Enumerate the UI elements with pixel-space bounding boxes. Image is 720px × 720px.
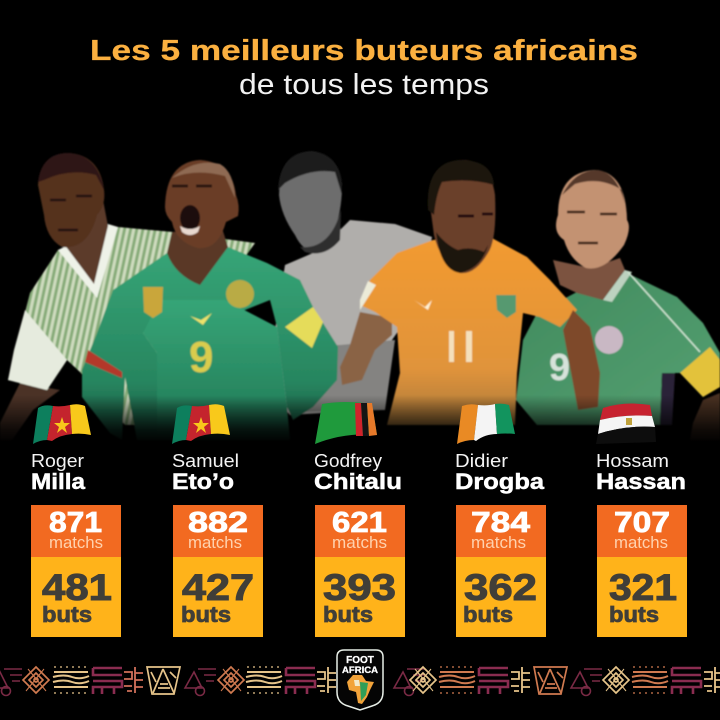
- matches box: matchs: [614, 533, 668, 552]
- matches box: matchs: [188, 533, 242, 552]
- goals box: [315, 557, 405, 637]
- player: Samuel Eto'o: [82, 160, 338, 440]
- logo: Foot Africa: [337, 650, 383, 710]
- matches box: 707: [614, 507, 670, 539]
- matches box: matchs: [471, 533, 526, 552]
- icon: Africa map: [347, 675, 374, 704]
- goals box: 393: [323, 567, 396, 608]
- matches box: matchs: [49, 533, 103, 552]
- player photos: [0, 151, 720, 440]
- name: [31, 451, 86, 494]
- flag: Zambia: [315, 402, 377, 444]
- name: [314, 451, 402, 494]
- matches box: 621: [332, 507, 387, 539]
- flag: Ivory Coast: [457, 404, 515, 444]
- flag: Cameroon (Milla): [33, 404, 91, 444]
- player card: Hossam Hassan: [596, 451, 687, 637]
- matches box: 871: [49, 507, 102, 539]
- name: Hossam: [596, 451, 669, 471]
- matches box: [597, 505, 687, 557]
- goals box: [597, 557, 687, 637]
- player: Didier Drogba: [340, 160, 600, 425]
- name: Eto’o: [172, 469, 234, 494]
- player card: Samuel Eto'o: [172, 451, 263, 637]
- flag: Cameroon (Eto'o): [172, 404, 230, 444]
- title: de tous les temps: [239, 69, 489, 101]
- matches box: [31, 505, 121, 557]
- name: [172, 451, 239, 494]
- goals box: 362: [464, 567, 537, 608]
- goals box: buts: [609, 602, 659, 627]
- flag: Egypt: [596, 404, 656, 444]
- name: Hassan: [596, 469, 686, 494]
- goals box: 321: [609, 567, 677, 608]
- goals box: [31, 557, 121, 637]
- name: Milla: [31, 469, 86, 494]
- matches box: [173, 505, 263, 557]
- title: Les 5 meilleurs buteurs africains: [90, 35, 638, 67]
- player card: Didier Drogba: [455, 451, 546, 637]
- title: [90, 35, 638, 101]
- goals box: buts: [42, 602, 92, 627]
- matches box: 784: [471, 507, 530, 539]
- matches box: matchs: [332, 533, 387, 552]
- goals box: [173, 557, 263, 637]
- name: [596, 451, 686, 494]
- name: Chitalu: [314, 469, 402, 494]
- name: Roger: [31, 451, 84, 471]
- goals box: 427: [182, 567, 254, 608]
- matches box: [315, 505, 405, 557]
- footer pattern: left band: [0, 667, 336, 696]
- goals box: buts: [463, 602, 513, 627]
- player: Hossam Hassan: 9: [549, 347, 570, 389]
- logo: Foot Africa: FOOT: [346, 655, 374, 666]
- player: Hossam Hassan: [516, 170, 720, 440]
- name: Drogba: [455, 469, 545, 494]
- player: Roger Milla: [0, 153, 255, 440]
- photo fade to black: [0, 395, 720, 445]
- name: [455, 451, 545, 494]
- name: Godfrey: [314, 451, 382, 471]
- logo: Foot Africa: AFRICA: [342, 665, 378, 676]
- player: Godfrey Chitalu: [275, 151, 432, 415]
- goals box: 481: [42, 567, 112, 608]
- matches box: 882: [188, 507, 248, 539]
- goals box: [456, 557, 546, 637]
- goals box: buts: [181, 602, 231, 627]
- matches box: [456, 505, 546, 557]
- name: Samuel: [172, 451, 239, 471]
- footer pattern: right band: [394, 667, 720, 696]
- player card: Roger Milla: [31, 451, 121, 637]
- player card: Godfrey Chitalu: [314, 451, 405, 637]
- player: Samuel Eto'o: 9: [189, 333, 213, 382]
- name: Didier: [455, 451, 508, 471]
- goals box: buts: [323, 602, 373, 627]
